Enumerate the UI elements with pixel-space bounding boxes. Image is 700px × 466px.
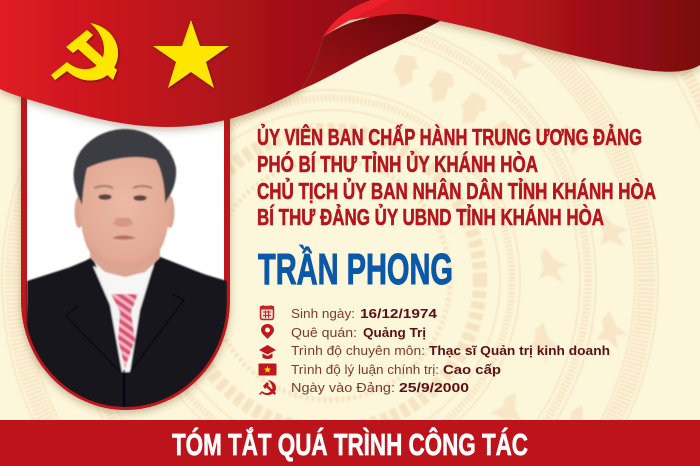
- name: TRẦN PHONG: [258, 244, 453, 294]
- row: education: [291, 343, 610, 358]
- icon: location pin: [261, 324, 274, 339]
- row: party entry date: Ngày vào Đảng:: [291, 380, 395, 395]
- bottom banner title: TÓM TẮT QUÁ TRÌNH CÔNG TÁC: [172, 426, 528, 462]
- row: home town: Quê quán:: [291, 325, 357, 340]
- row: education: Thạc sĩ Quản trị kinh doanh: [429, 343, 610, 358]
- row: birth date: [291, 306, 438, 321]
- icon: hammer and sickle: [51, 23, 118, 81]
- row: party entry date: 25/9/2000: [399, 380, 469, 395]
- ears: [74, 196, 84, 228]
- row: home town: Quảng Trị: [363, 325, 426, 340]
- bottom banner: [0, 420, 700, 466]
- hair: [74, 129, 176, 205]
- row: birth date: 16/12/1974: [360, 306, 438, 321]
- portrait photo: [27, 129, 227, 410]
- row: home town: [291, 325, 426, 340]
- ribbon: upper right: [300, 0, 700, 72]
- red ribbon header: [0, 0, 700, 127]
- icon: graduation cap: [259, 345, 276, 359]
- face: [79, 149, 172, 252]
- ribbon: dark fold: [300, 14, 440, 90]
- row: political theory: Cao cấp: [443, 362, 501, 377]
- neck: [89, 250, 161, 278]
- icon: small hammer and sickle: [259, 380, 276, 395]
- position titles: [257, 122, 656, 230]
- icon: calendar: [260, 305, 274, 320]
- portrait panel: [24, 90, 227, 410]
- row: political theory: [291, 362, 501, 377]
- icon: flag: [258, 364, 276, 376]
- ribbon: main left: [0, 0, 372, 127]
- icon: yellow star: [153, 20, 229, 88]
- row: birth date: Sinh ngày:: [291, 306, 355, 321]
- position titles: PHÓ BÍ THƯ TỈNH ỦY KHÁNH HÒA: [257, 149, 538, 177]
- row: party entry date: [291, 380, 469, 395]
- row: education: Trình độ chuyên môn:: [291, 343, 425, 358]
- portrait frame: [24, 90, 227, 407]
- row: political theory: Trình độ lý luận chính trị:: [291, 362, 439, 377]
- ribbon: bright tip: [323, 0, 390, 37]
- personal details list: [258, 305, 610, 395]
